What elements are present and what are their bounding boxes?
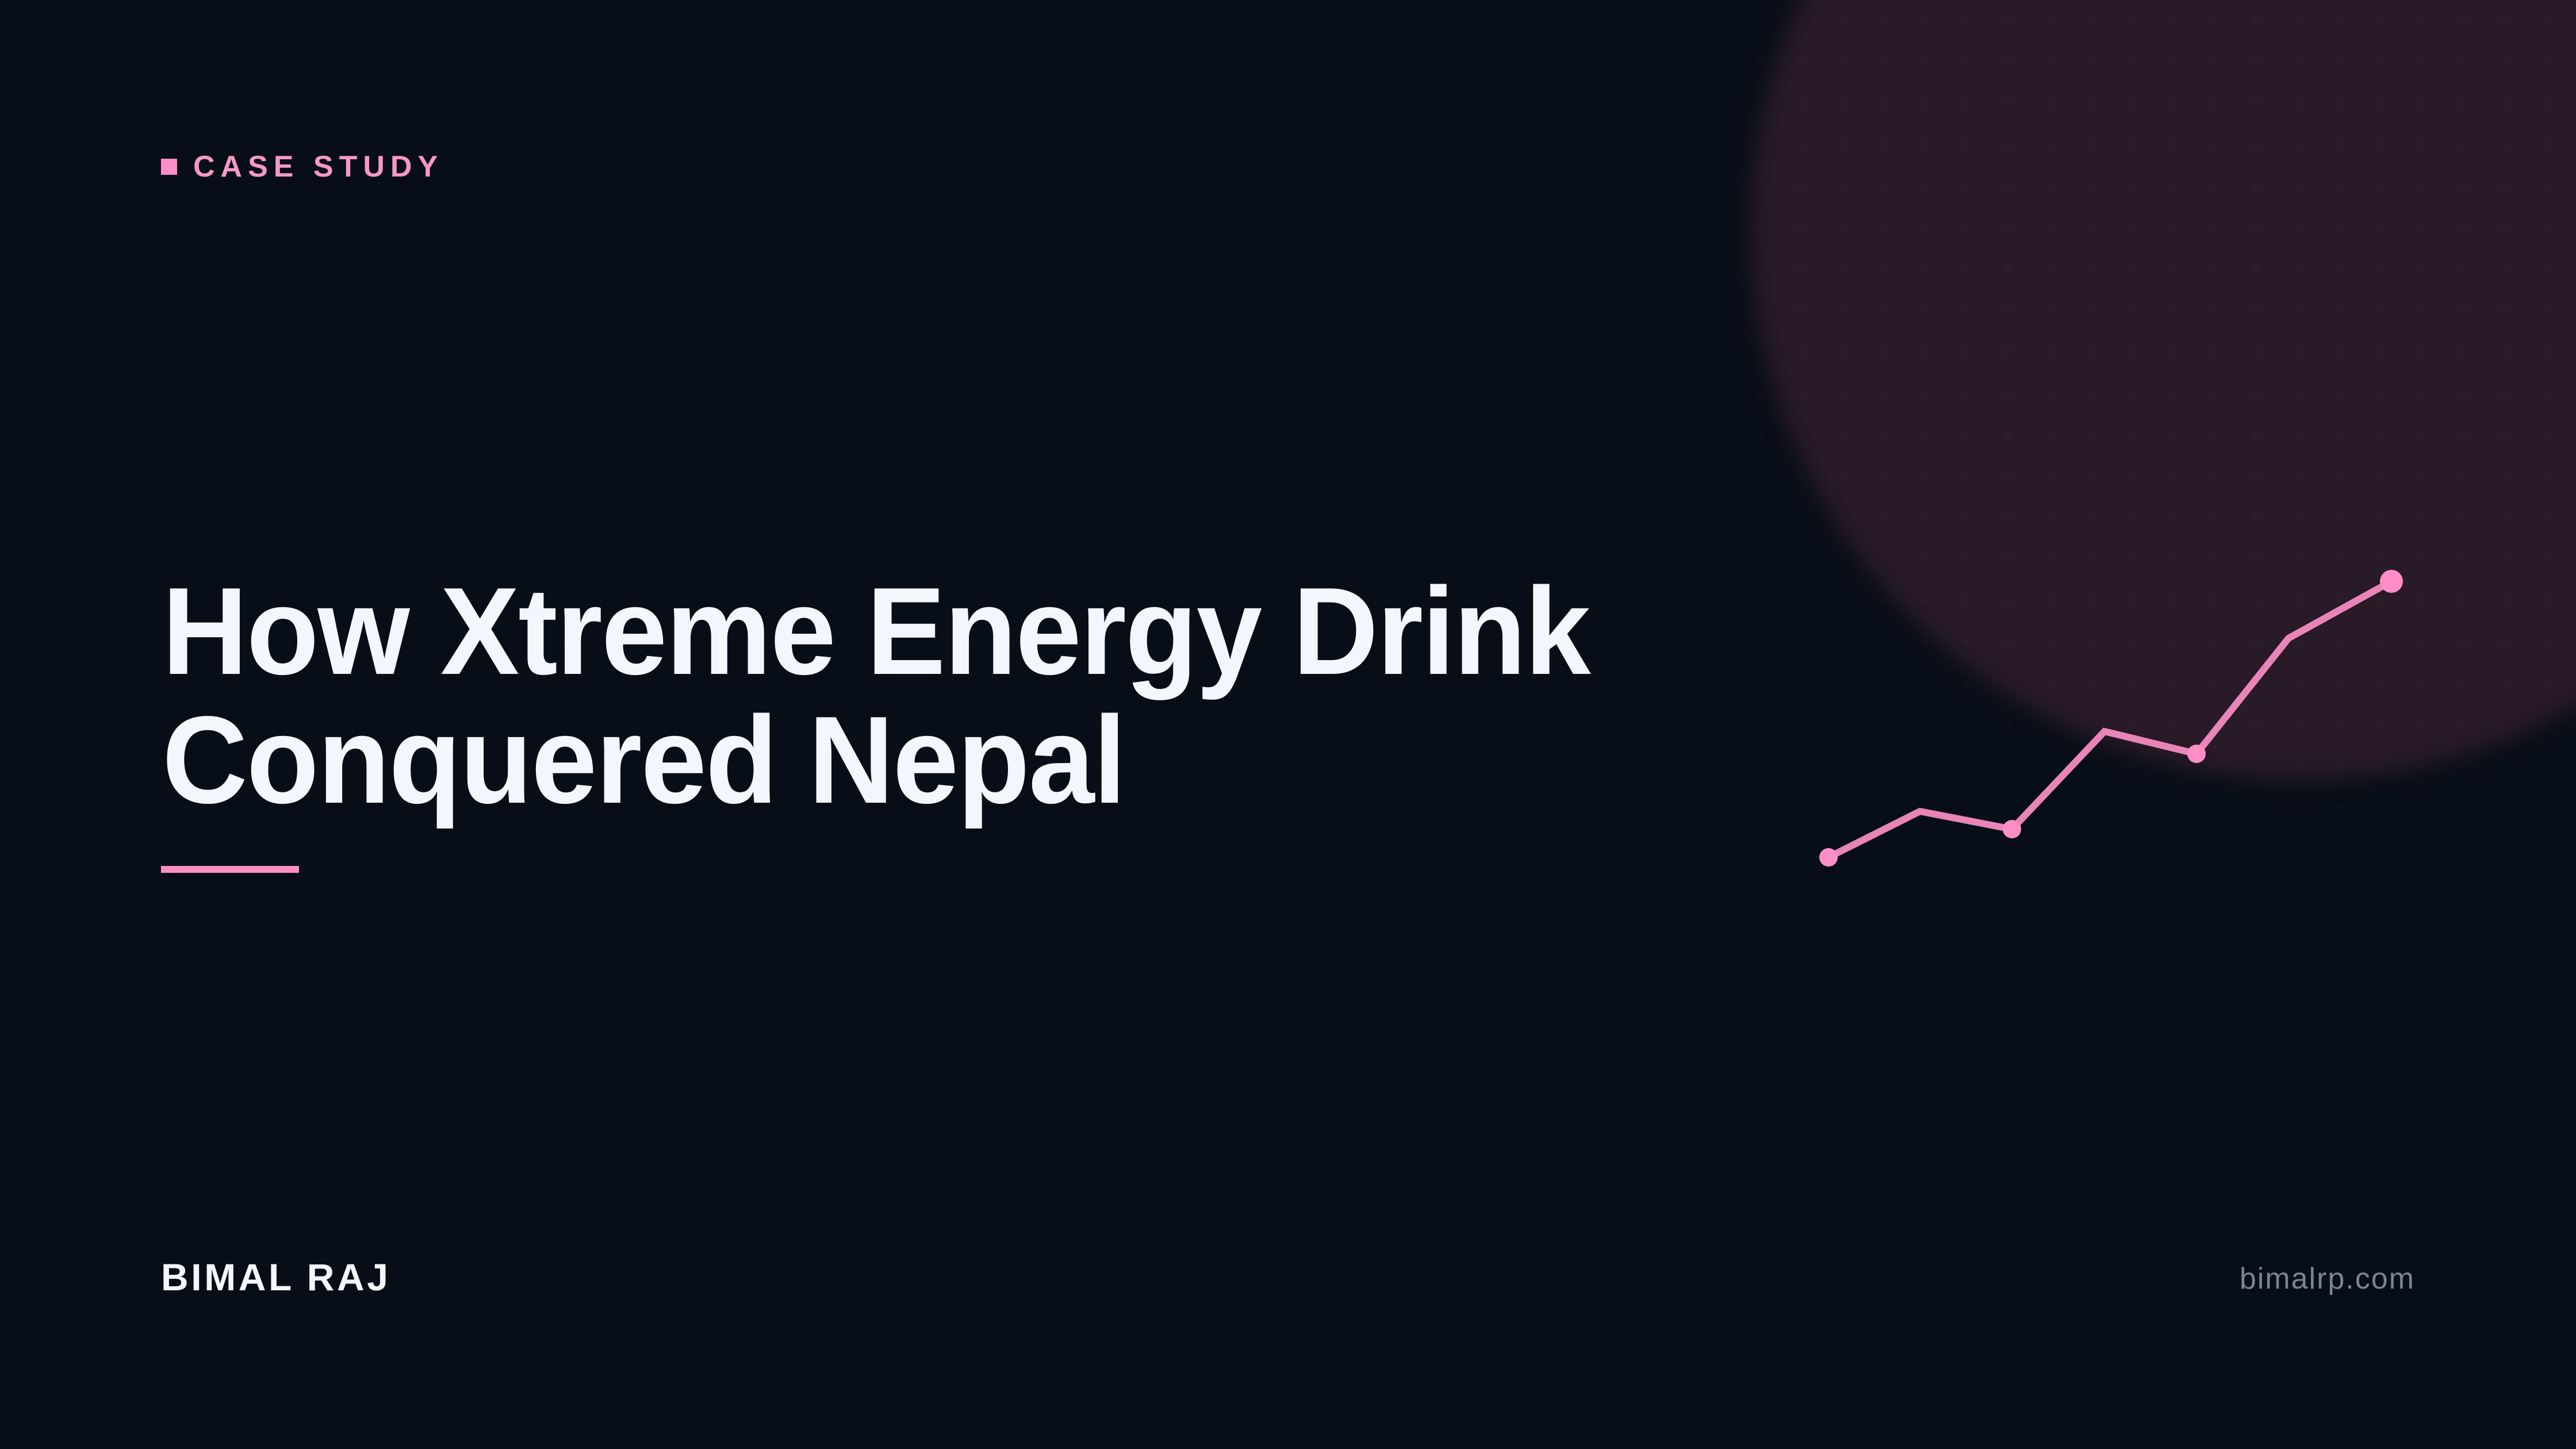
data points	[1819, 570, 2403, 867]
author name: BIMAL RAJ	[161, 1256, 391, 1298]
eyebrow label: CASE STUDY	[193, 150, 443, 183]
website url: bimalrp.com	[2240, 1262, 2415, 1295]
eyebrow: case study	[161, 150, 443, 183]
decorative glow circle	[1750, 0, 2576, 780]
title	[162, 561, 1591, 829]
line chart: rising trend	[1819, 570, 2403, 867]
title: Conquered Nepal	[162, 690, 1125, 829]
title: How Xtreme Energy Drink	[162, 561, 1589, 700]
title accent underline	[161, 866, 299, 873]
trend line	[1828, 581, 2391, 857]
eyebrow square marker	[161, 159, 177, 175]
